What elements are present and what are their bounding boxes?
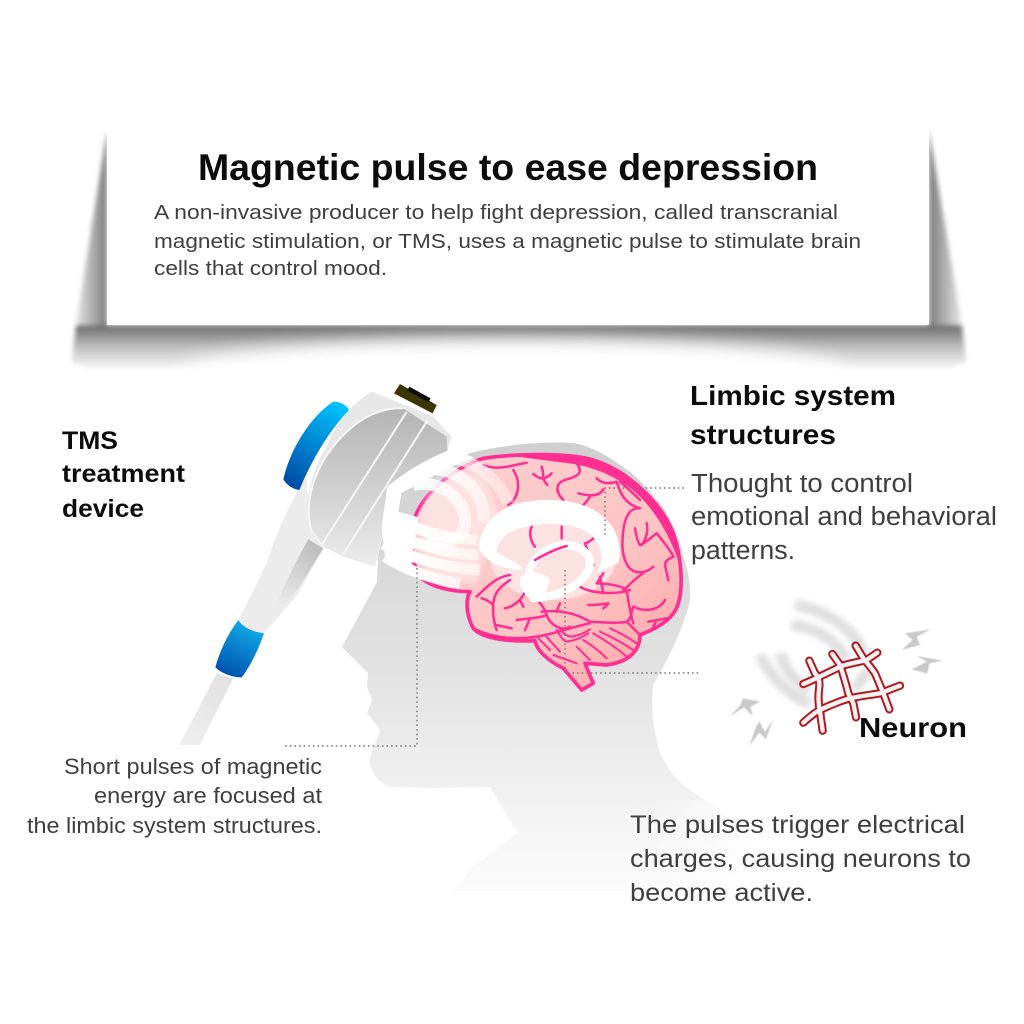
text: pulses trigger: become active. [630, 879, 813, 907]
heading: TMS treatment device: treatment [62, 460, 186, 488]
label: Neuron: Neuron [859, 712, 967, 743]
head silhouette [342, 443, 820, 895]
TMS device [179, 384, 452, 745]
text: short pulses: energy are focused at [94, 783, 322, 808]
brain outline [411, 455, 681, 690]
coil housing shaded panel [308, 408, 447, 565]
cable [179, 673, 233, 745]
neuron motion waves [760, 605, 868, 703]
text: short pulses: the limbic system structures. [27, 813, 322, 838]
intro paragraph: magnetic stimulation, or TMS, uses a magnetic pulse to stimulate brain [154, 230, 861, 253]
handle shaded stripe [273, 539, 323, 612]
text: short pulses: Short pulses of magnetic [64, 754, 322, 779]
text: limbic description: emotional and behavioral [691, 503, 997, 531]
cerebellum folds [538, 628, 637, 663]
intro paragraph: cells that control mood. [154, 257, 387, 280]
lower wave bands [383, 517, 480, 583]
heading: TMS treatment device: TMS [62, 427, 118, 455]
solid white wave base [382, 449, 474, 570]
text: pulses trigger: The pulses trigger electrical [630, 811, 965, 839]
olive control box [394, 384, 437, 413]
leader line: pulses [285, 568, 417, 746]
limbic inner tint [490, 513, 617, 600]
panel highlight [309, 408, 427, 555]
header panel with shadow [72, 110, 966, 405]
heading: limbic system structures: Limbic system [690, 380, 896, 411]
lightning bolts [729, 629, 943, 746]
thick upper rim [503, 454, 682, 570]
text: limbic description [691, 470, 997, 565]
black button [407, 387, 431, 402]
limbic inner arc [528, 545, 590, 598]
neuron mesh outline [803, 646, 900, 731]
heading: TMS treatment device [62, 427, 186, 523]
neuron illustration [729, 605, 943, 746]
text: pulses trigger [630, 811, 971, 907]
text: pulses trigger: charges, causing neurons to [630, 845, 971, 873]
heading: limbic system structures: structures [690, 419, 836, 450]
brain [411, 454, 682, 690]
intro paragraph [154, 201, 861, 280]
handle [238, 477, 323, 633]
translucent pulse wash [418, 470, 500, 583]
text: limbic description: patterns. [691, 537, 795, 565]
leader line: neuron [565, 570, 700, 673]
magnetic pulse waves [382, 449, 508, 583]
neuron mesh inner [803, 646, 900, 731]
title: Magnetic pulse to ease depression [198, 147, 818, 188]
leader line: limbic [605, 488, 684, 537]
limbic inner fold [535, 546, 567, 560]
text: short pulses [27, 754, 322, 838]
heading: limbic system structures [690, 380, 896, 450]
lower blue grip [215, 620, 264, 677]
coil housing [307, 392, 452, 567]
upper wave arcs [413, 457, 508, 544]
text: limbic description: Thought to control [691, 470, 913, 498]
heading: TMS treatment device: device [62, 495, 144, 523]
limbic blob [520, 573, 550, 602]
cortical folds [473, 457, 673, 638]
limbic system structures [478, 500, 620, 573]
upper blue pad [283, 402, 349, 490]
intro paragraph: A non-invasive producer to help fight depression, called transcranial [154, 201, 838, 224]
